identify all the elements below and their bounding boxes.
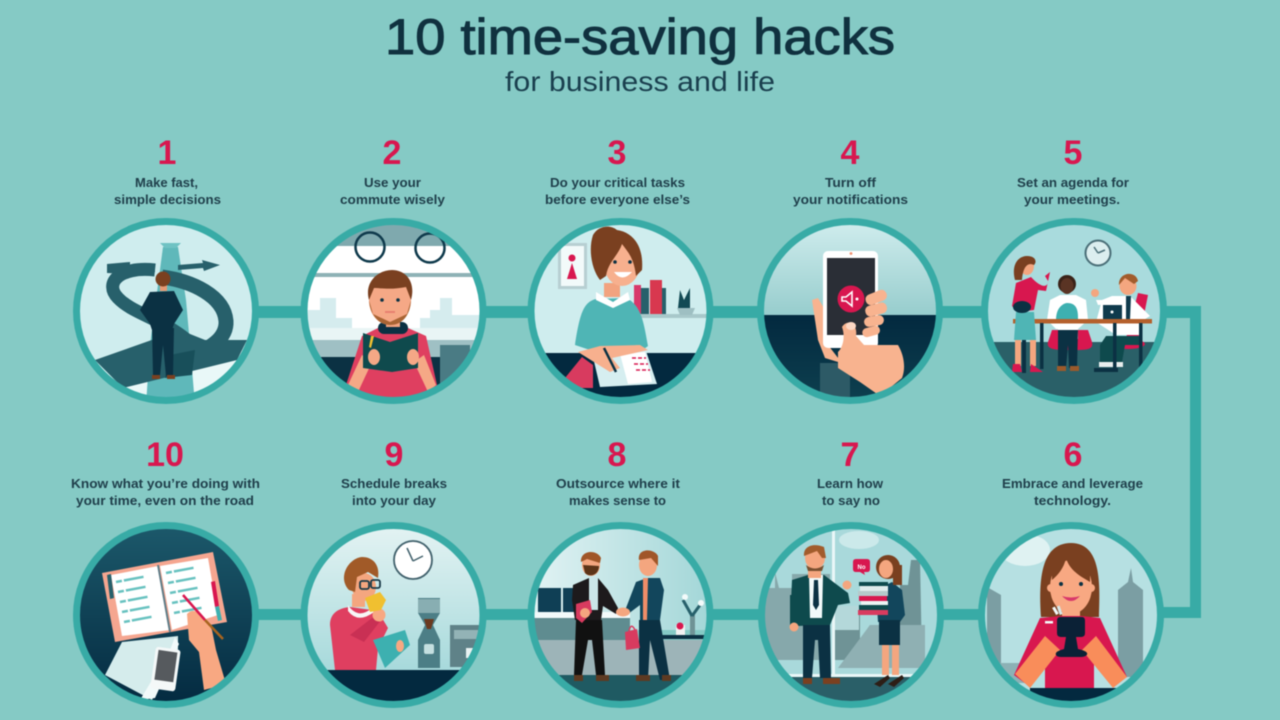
number 3: 3	[608, 134, 626, 172]
hack 6	[975, 436, 1170, 713]
label 1: Make fast,	[135, 176, 198, 190]
label 3: before everyone else’s	[545, 193, 690, 207]
label 5	[1017, 176, 1129, 207]
label 1	[114, 176, 221, 207]
illustration: planner and phone on a desk	[70, 520, 265, 710]
number 4: 4	[841, 134, 860, 172]
illustration: business handshake	[525, 520, 720, 715]
hack 4	[755, 134, 945, 405]
label 10	[71, 477, 260, 508]
title: 10 time-saving hacks	[385, 9, 895, 65]
illustration: team meeting around a table	[980, 215, 1170, 407]
label 4: Turn off	[825, 176, 877, 190]
hack 8	[525, 436, 720, 715]
number 1: 1	[158, 134, 176, 172]
label 7: to say no	[822, 494, 880, 508]
subtitle: for business and life	[505, 66, 775, 97]
label 9: Schedule breaks	[341, 477, 447, 491]
label 5: your meetings.	[1024, 193, 1120, 207]
illustration: hand holding a phone	[755, 215, 945, 405]
label 5: Set an agenda for	[1017, 176, 1129, 190]
hack 9	[300, 436, 490, 715]
illustration: woman using a smartphone	[975, 520, 1170, 713]
label 7: Learn how	[817, 477, 883, 491]
number 2: 2	[383, 134, 401, 172]
label 6	[1002, 477, 1143, 508]
illustration: reading on the train	[300, 215, 490, 415]
number 9: 9	[385, 436, 403, 474]
label 10: your time, even on the road	[76, 494, 254, 508]
label 6: Embrace and leverage	[1002, 477, 1143, 491]
label 2: Use your	[364, 176, 421, 190]
illustration: woman working at a desk	[527, 218, 714, 404]
number 6: 6	[1064, 436, 1082, 474]
illustration: man declining a stack of work	[755, 520, 950, 712]
illustration: man at a crossroads	[72, 218, 260, 404]
label 6: technology.	[1034, 494, 1111, 508]
illustration: coffee break	[300, 520, 490, 715]
label 8	[556, 477, 681, 508]
hack 2	[300, 134, 490, 415]
label 1: simple decisions	[114, 193, 221, 207]
connector path linking the circles	[250, 306, 1201, 620]
label 9: into your day	[352, 494, 436, 508]
hack 3	[525, 134, 720, 415]
label 2	[340, 176, 445, 207]
label 8: Outsource where it	[556, 477, 681, 491]
label 7	[817, 477, 883, 508]
label 3	[545, 176, 690, 207]
label 8: makes sense to	[569, 494, 666, 508]
label 9	[341, 477, 447, 508]
number 5: 5	[1064, 134, 1082, 172]
number 8: 8	[608, 436, 626, 474]
number 10: 10	[146, 436, 184, 474]
label 4	[793, 176, 908, 207]
hack 1	[72, 140, 260, 404]
hack 7	[755, 436, 950, 712]
label 10: Know what you’re doing with	[71, 477, 260, 491]
hack 10	[70, 436, 265, 710]
label 3: Do your critical tasks	[550, 176, 685, 190]
number 7: 7	[841, 436, 859, 474]
label 4: your notifications	[793, 193, 908, 207]
speech bubble text: No	[858, 565, 866, 571]
label 2: commute wisely	[340, 193, 445, 207]
hack 5	[980, 134, 1170, 407]
